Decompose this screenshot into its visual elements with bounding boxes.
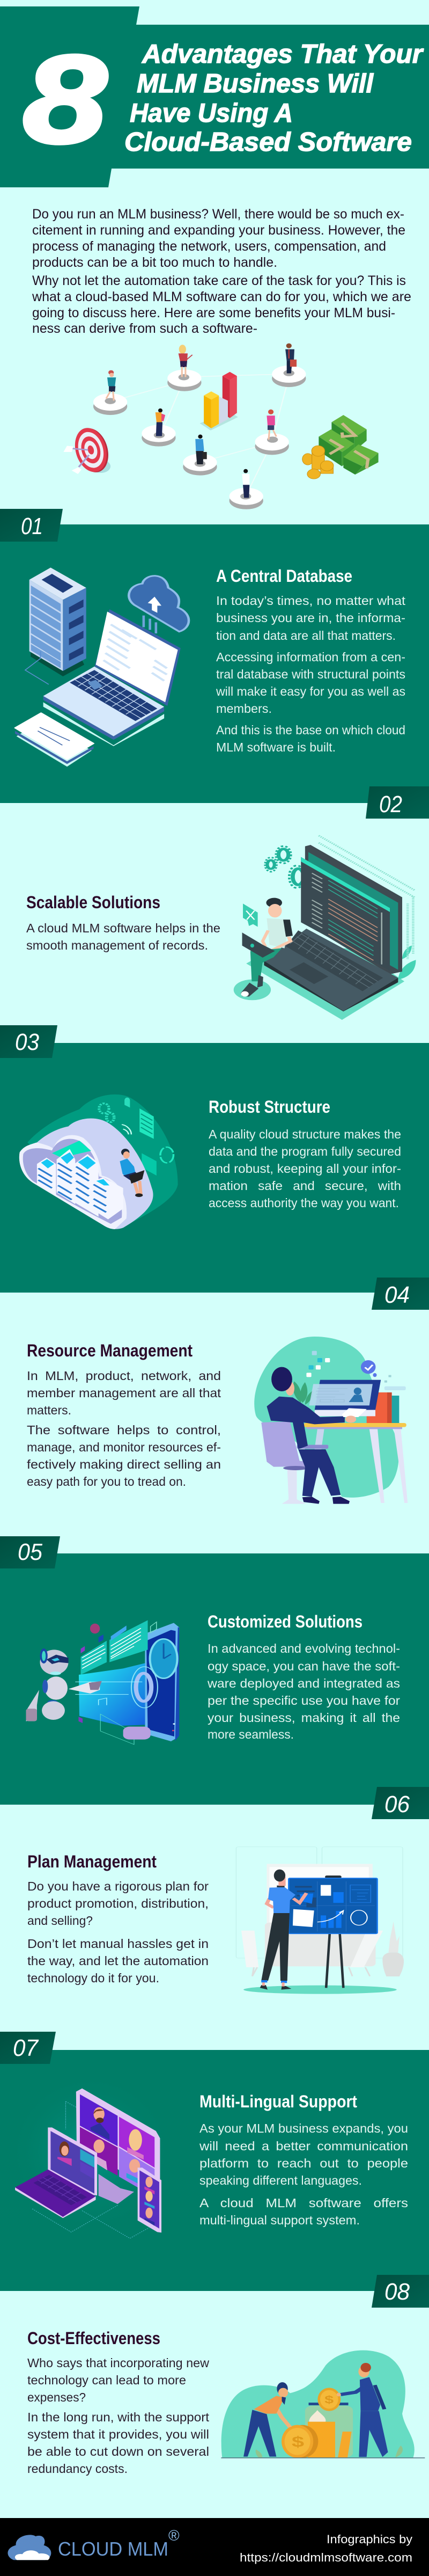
body text: redundancy costs.: [27, 2462, 128, 2476]
board: [289, 1876, 378, 1933]
body text: [26, 921, 220, 952]
body text: Don’t let manual hassles get in: [27, 1937, 209, 1951]
icon: upload cloud: [129, 576, 189, 633]
title: Have Using A: [130, 99, 293, 128]
illustration: video call on monitor, laptop and phone: [8, 2074, 172, 2238]
laptop: [15, 2127, 97, 2218]
jar of coins: [282, 2388, 353, 2458]
panel: section 6 plan management: [0, 1787, 429, 2050]
number tab 03: 03: [15, 1029, 39, 1055]
body text: And this is the base on which cloud: [216, 723, 405, 737]
number tab 08: [372, 2275, 429, 2308]
body text: the way, and let the automation: [27, 1954, 209, 1968]
body text: business you are in, the informa-: [216, 611, 405, 625]
body text: In the long run, with the support: [27, 2410, 209, 2424]
body text: Who says that incorporating new: [27, 2356, 210, 2370]
body text: [27, 1369, 221, 1488]
number tab 05: [0, 1536, 60, 1568]
body text: In today’s times, no matter what: [216, 594, 405, 608]
number tab 07: 07: [13, 2035, 39, 2061]
chair: [261, 1421, 328, 1504]
body text: speaking different languages.: [199, 2173, 362, 2187]
panel: section 2 scalable solutions: [0, 786, 429, 1043]
dotted connectors: [32, 2101, 149, 2238]
illustration: business network with charts, target and money: [63, 344, 379, 509]
illustration: people saving coins in a jar: [221, 2351, 425, 2458]
number tab 04: 04: [384, 1282, 410, 1308]
icon: developer figure: [241, 898, 293, 997]
body text: fectively making direct selling an: [27, 1457, 221, 1471]
intro text block: products can be a bit too much to handle.: [32, 255, 277, 270]
illustration: developer sitting on giant laptop: [234, 836, 416, 1020]
panel: footer: [0, 2518, 429, 2576]
server stacks: [37, 1149, 123, 1220]
body text: platform to reach out to people: [199, 2156, 408, 2170]
title: MLM Business Will: [137, 69, 374, 98]
illustration: man working at desk: [254, 1337, 408, 1504]
body text: product promotion, distribution,: [27, 1896, 209, 1910]
front cloud: [19, 1119, 153, 1229]
man figure: [267, 1367, 367, 1504]
illustration: cloud data center with woman: [19, 1094, 178, 1229]
monitor: [76, 2089, 160, 2204]
intro text block: what a cloud-based MLM software can do for you, which we are: [32, 289, 411, 304]
number tab 05: 05: [18, 1539, 42, 1565]
heading: Scalable Solutions: [26, 893, 160, 912]
intro text block: [32, 207, 411, 336]
woman with laptop: [120, 1149, 144, 1197]
jar of coins: $: [292, 2434, 305, 2450]
body text: members.: [216, 702, 272, 716]
title: [124, 40, 424, 157]
footer credit text: Infographics by: [327, 2533, 412, 2546]
body text: technology do it for you.: [27, 1971, 159, 1985]
body text: Do you have a rigorous plan for: [27, 1879, 209, 1893]
footer credit text: https://cloudmlmsoftware.com: [240, 2551, 412, 2564]
panel: section 3 robust structure: [0, 1025, 429, 1293]
body text: smooth management of records.: [26, 938, 208, 952]
monitor: [309, 1380, 381, 1416]
body text: A cloud MLM software offers: [199, 2196, 408, 2210]
body text: MLM software is built.: [216, 740, 336, 754]
body text: per the specific use you have for: [208, 1694, 400, 1707]
body text: Accessing information from a cen-: [216, 650, 405, 664]
number tab 07: [0, 2032, 56, 2064]
number tab 01: [0, 509, 63, 542]
panel: section 8 cost-effectiveness: [0, 2275, 429, 2518]
body text: and selling?: [27, 1914, 93, 1928]
title: Advantages That Your: [142, 40, 424, 69]
body text: ogy space, you can have the soft-: [208, 1659, 400, 1673]
number tab 04: [372, 1278, 429, 1310]
body text: member management are all that: [27, 1386, 221, 1400]
logo: Cloud MLM: ®: [168, 2527, 180, 2544]
body text: ware deployed and integrated as: [207, 1676, 400, 1690]
network discs: [93, 366, 306, 509]
books: [367, 1392, 399, 1423]
number tab 01: 01: [21, 513, 43, 539]
body text: [216, 594, 405, 754]
floating squares: [306, 1351, 406, 1390]
body text: more seamless.: [208, 1727, 294, 1741]
body text: [207, 1641, 400, 1741]
number tab 08: 08: [384, 2279, 410, 2305]
tablet frame: [145, 1623, 179, 1741]
body text: your business, making it all the: [208, 1711, 400, 1725]
footer credit text: [240, 2533, 412, 2564]
illustration: man presenting at blue board: [236, 1847, 404, 1994]
heading: Cost-Effectiveness: [27, 2329, 160, 2348]
body text: A quality cloud structure makes the: [209, 1127, 401, 1141]
number tab 03: [0, 1025, 57, 1058]
body text: [27, 1879, 209, 1985]
heading: Resource Management: [27, 1341, 193, 1360]
body text: tion and data are all that matters.: [216, 629, 396, 643]
jar of coins: $: [324, 2394, 334, 2406]
body text: In MLM, product, network, and: [27, 1369, 221, 1383]
robot: [26, 1648, 102, 1721]
man figure: [337, 2363, 388, 2457]
illustration: server, cloud, laptop and phone: [15, 567, 189, 767]
body text: manage, and monitor resources ef-: [27, 1440, 221, 1454]
icon: laptop: [43, 609, 181, 746]
icon: gears: [265, 846, 305, 888]
logo: Cloud MLM: [8, 2527, 180, 2560]
icon: check badge: [361, 1360, 377, 1377]
number tab 06: [372, 1787, 429, 1819]
intro text block: Do you run an MLM business? Well, there would be so much ex-: [32, 207, 404, 222]
body text: technology can lead to more: [27, 2373, 186, 2387]
background room: [236, 1847, 404, 1976]
body text: As your MLM business expands, you: [199, 2121, 408, 2135]
bar chart: [199, 372, 238, 430]
panel: section 4 resource management: [0, 1278, 429, 1553]
panel: section 1 central database: [0, 509, 429, 803]
body text: will need a better communication: [199, 2139, 408, 2153]
body text: easy path for you to tread on.: [27, 1475, 186, 1488]
binary code pattern: [319, 836, 415, 959]
body text: multi-lingual support system.: [199, 2213, 360, 2227]
body text: [199, 2121, 408, 2227]
body text: will make it easy for you as well as: [216, 684, 405, 698]
heading: Customized Solutions: [208, 1612, 363, 1631]
intro text block: process of managing the network, users, compensation, and: [32, 239, 386, 254]
icon: giant laptop: [264, 845, 402, 1011]
number tab 02: 02: [379, 791, 402, 818]
desk: [304, 1423, 408, 1503]
panel: section 5 customized solutions: [0, 1536, 429, 1805]
icon: phone: [15, 713, 93, 767]
body text: [209, 1127, 401, 1210]
icon: cloud: [8, 2535, 51, 2560]
heading: Robust Structure: [209, 1097, 330, 1116]
number tab 06: 06: [384, 1791, 410, 1818]
icon: server rack: [25, 567, 86, 684]
back cloud with icons: [27, 1094, 178, 1225]
phone: [138, 2168, 161, 2232]
body text: tral database with structural points: [216, 667, 405, 681]
people: [106, 344, 297, 498]
icon: target with arrows: [63, 426, 112, 474]
body text: access authority the way you want.: [209, 1196, 399, 1210]
number tab 02: [366, 786, 429, 819]
man figure: [260, 1870, 313, 1990]
body text: mation safe and secure, with: [209, 1179, 401, 1193]
holographic panels: [75, 1620, 158, 1745]
title: Cloud-Based Software: [124, 128, 412, 157]
body text: matters.: [27, 1403, 71, 1417]
illustration: robot and holographic screen: [26, 1620, 179, 1745]
big numeral 8: 8: [23, 30, 107, 169]
heading: A Central Database: [216, 566, 352, 586]
intro text block: citement in running and expanding your business. However, the: [32, 223, 405, 238]
panel: section 7 multi-lingual support: [0, 2032, 429, 2291]
body text: A cloud MLM software helps in the: [26, 921, 220, 935]
intro text block: going to discuss here. Here are some benefits your MLM busi-: [32, 305, 395, 320]
icon: money stacks and coins: [302, 415, 379, 479]
heading: Multi-Lingual Support: [199, 2092, 357, 2111]
intro text block: ness can derive from such a software-: [32, 321, 257, 336]
body text: data and the program fully secured: [209, 1144, 401, 1158]
body text: be able to cut down on several: [27, 2444, 209, 2458]
heading: Plan Management: [27, 1852, 157, 1871]
body text: system that it provides, you will: [27, 2427, 209, 2441]
intro text block: Why not let the automation take care of the task for you? This is: [32, 273, 406, 288]
body text: In advanced and evolving technol-: [208, 1641, 400, 1655]
logo: Cloud MLM: CLOUD MLM: [58, 2538, 168, 2560]
body text: and robust, keeping all your infor-: [209, 1162, 401, 1176]
body text: [27, 2356, 210, 2476]
woman figure: [243, 2382, 290, 2457]
panel: header banner: [0, 6, 429, 187]
body text: The software helps to control,: [27, 1423, 221, 1437]
body text: expenses?: [27, 2390, 86, 2404]
